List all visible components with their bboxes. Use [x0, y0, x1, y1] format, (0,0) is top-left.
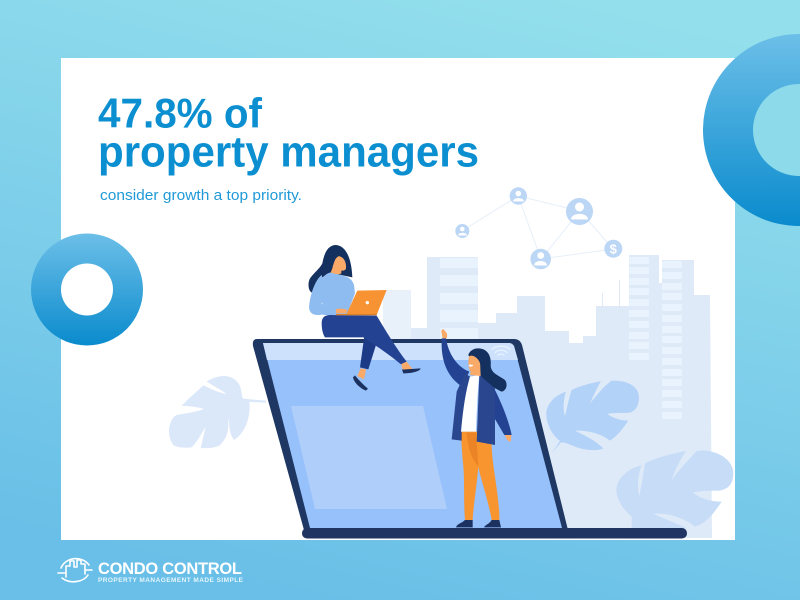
sweater: [319, 273, 355, 315]
icon: dollar: $: [610, 242, 618, 256]
hair back: [468, 348, 507, 392]
sweater arm: [309, 275, 337, 315]
laptop screen: [263, 343, 562, 528]
hand: [336, 309, 347, 313]
pale rear building: [383, 290, 411, 342]
right sleeve: [492, 390, 512, 435]
raised arm: [442, 338, 469, 387]
figure: woman standing waving: [441, 329, 512, 527]
laptop logo: [366, 301, 369, 304]
shoe right: [402, 368, 421, 373]
ring: left: [31, 234, 143, 346]
subtitle: consider growth a top priority.: [100, 187, 302, 204]
hair front: [468, 349, 483, 365]
icon: user small: [455, 224, 469, 238]
laptop: screen and frame: [253, 339, 687, 538]
foot left: [357, 368, 366, 379]
windows: middle tower: [629, 257, 649, 360]
logo name: CONDO CONTROL: [98, 560, 242, 578]
title: [98, 90, 479, 176]
icon: dollar: [604, 240, 622, 258]
icon: user top: [510, 187, 527, 205]
laptop base: [302, 528, 687, 538]
trousers: [461, 432, 499, 520]
ring: top right: [703, 34, 800, 226]
leaf: right bottom: [616, 450, 733, 528]
shirt: [461, 375, 479, 432]
network diagram: [455, 187, 622, 269]
icon: user centre: [530, 249, 551, 269]
title: 47.8% of: [98, 90, 262, 136]
laptop frame: [253, 339, 568, 530]
hair back: [309, 245, 352, 293]
hair fringe: [327, 250, 346, 273]
logo: Condo Control: [58, 559, 244, 584]
title: property managers: [98, 128, 479, 176]
panel: white card: [61, 58, 735, 540]
hand raised: [441, 329, 447, 338]
jacket: [452, 373, 495, 445]
city skyline: [383, 255, 712, 538]
logo icon: [58, 559, 92, 582]
windows: left tower: [440, 258, 478, 340]
face and neck: [331, 256, 346, 274]
windows: right tower: [662, 261, 682, 419]
screen panel: [291, 406, 447, 509]
laptop top band: [263, 343, 518, 360]
laptop: [346, 290, 387, 315]
main skyline: [411, 255, 712, 538]
trouser shadow: [467, 433, 478, 466]
icon: wifi: [492, 346, 510, 355]
laptop base: [336, 314, 377, 315]
shoes: [456, 520, 501, 527]
logo tagline: PROPERTY MANAGEMENT MADE SIMPLE: [98, 577, 244, 584]
neck and face: [468, 356, 481, 376]
rear leg: [360, 332, 376, 369]
hand right: [505, 435, 511, 442]
leaf: left: [169, 376, 266, 448]
smile: [469, 364, 473, 367]
leaf: right middle: [546, 381, 639, 453]
figure: woman sitting with laptop: [309, 245, 421, 391]
trousers: [322, 315, 407, 364]
icon: user large: [566, 198, 593, 225]
shoe left: [353, 375, 368, 391]
foot right: [401, 362, 413, 370]
